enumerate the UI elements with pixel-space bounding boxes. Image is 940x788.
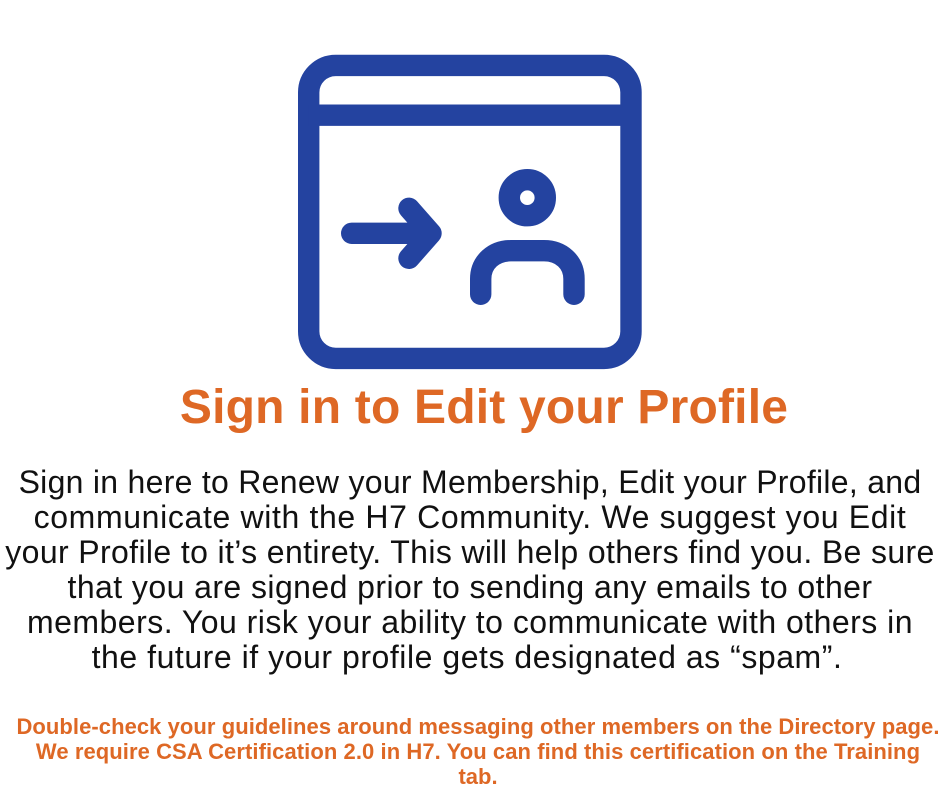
body text block: the future if your profile gets designated as “spam”. bbox=[92, 639, 842, 675]
guideline note: Double-check your guidelines around messaging other members on the Directory page. bbox=[16, 714, 940, 739]
body text block: communicate with the H7 Community. We suggest you Edit bbox=[34, 499, 906, 535]
body text block: Sign in here to Renew your Membership, Edit your Profile, and bbox=[19, 464, 921, 500]
guideline note: We require CSA Certification 2.0 in H7. You can find this certification on the Training bbox=[36, 739, 920, 764]
icon: browser window with arrow and user bbox=[298, 54, 642, 370]
title: Sign in to Edit your Profile bbox=[180, 381, 788, 434]
body text block: members. You risk your ability to communicate with others in bbox=[27, 604, 913, 640]
guideline note bbox=[16, 714, 940, 788]
body text block: your Profile to it’s entirety. This will help others find you. Be sure bbox=[5, 534, 935, 570]
body text block bbox=[5, 464, 935, 675]
body text block: that you are signed prior to sending any emails to other bbox=[68, 569, 872, 605]
